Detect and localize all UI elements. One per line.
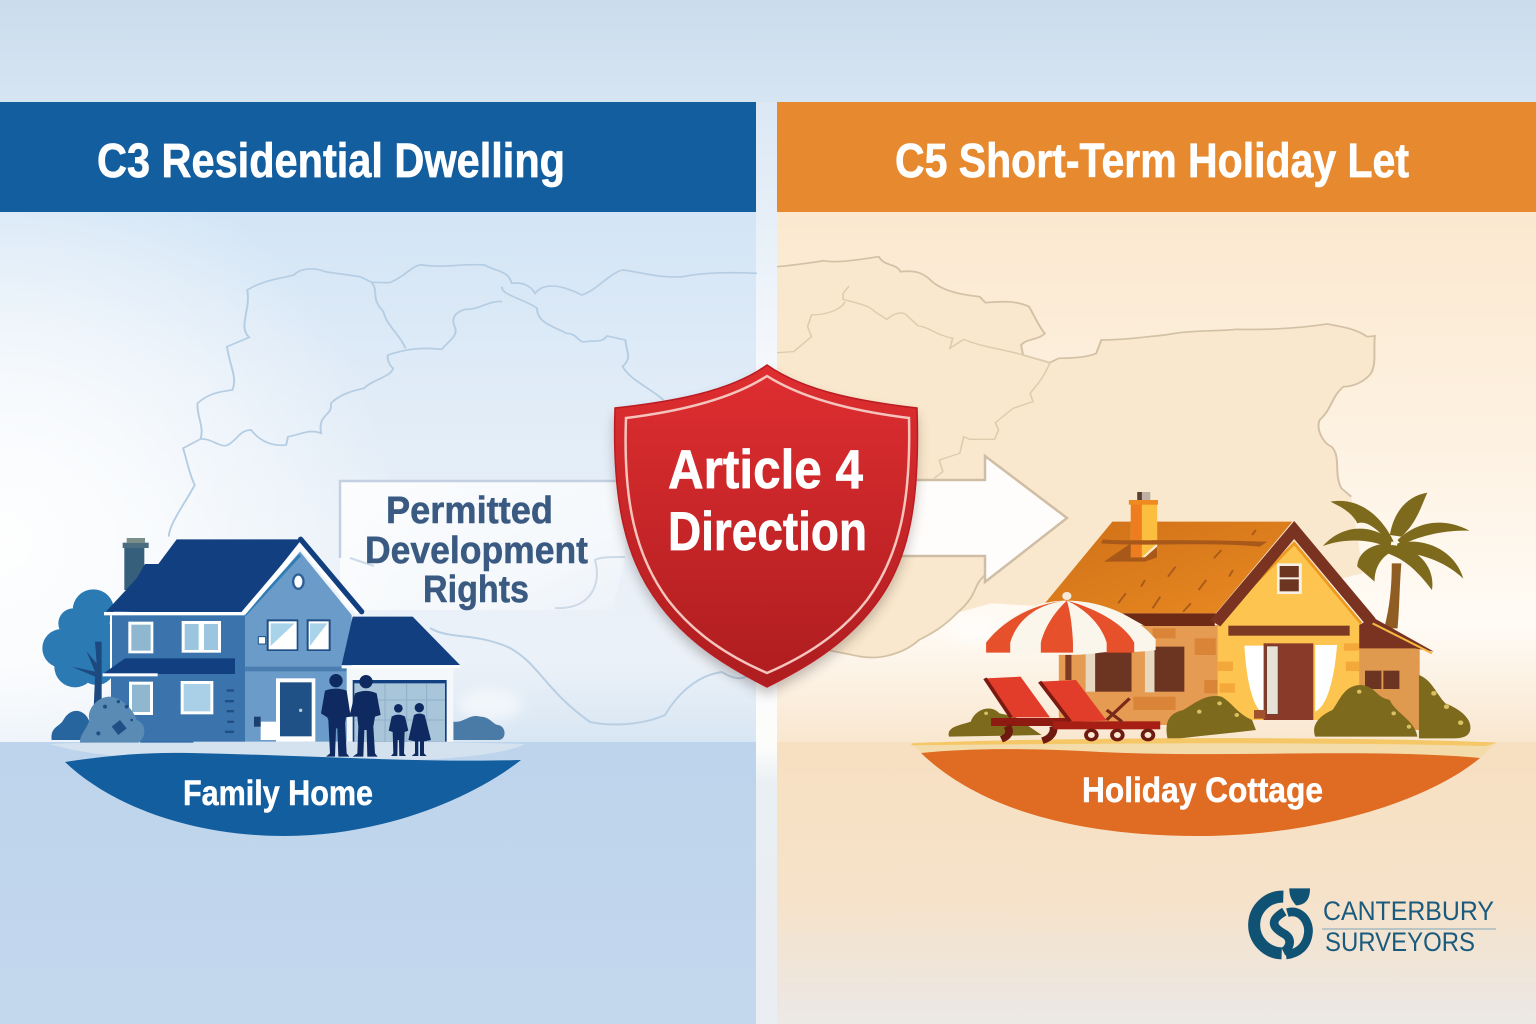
caption base: Family Home: Family Home (183, 774, 373, 813)
caption base: Holiday Cottage (921, 749, 1480, 836)
house body (80, 539, 302, 743)
lounger: right (1040, 680, 1160, 740)
illustration: family home (42, 538, 505, 757)
bush with spots (80, 697, 144, 743)
icon: tree (42, 589, 117, 717)
logo wordmark (1323, 896, 1494, 957)
label: Permitted Development Rights: Permitted (386, 490, 553, 532)
icon: palm tree (1323, 493, 1469, 628)
upper windows (128, 621, 221, 653)
panel: C3 residential (0, 212, 757, 1024)
ground: left island (50, 740, 525, 762)
logo: Canterbury Surveyors (1254, 888, 1496, 957)
haze beside umbrella (953, 620, 997, 644)
logo wordmark: SURVEYORS (1325, 927, 1475, 957)
cottage windows (1086, 647, 1184, 692)
cottage gable (1215, 530, 1371, 720)
door and curtains (1244, 643, 1337, 720)
ground: right island (912, 739, 1496, 760)
arrow: towards C5 (900, 456, 1067, 582)
shrub highlights (984, 690, 1463, 729)
icon: beach umbrella (986, 592, 1156, 680)
header: C5 Short-Term Holiday Let: C5 Short-Term Holiday Let (895, 135, 1409, 188)
door (254, 678, 315, 742)
panel: C5 holiday let (777, 212, 1536, 1024)
icon: chimney (123, 538, 149, 590)
figure: child 1 (389, 704, 408, 756)
logo mark (1254, 888, 1310, 955)
cottage left wall (1059, 613, 1220, 725)
figure: adult 1 (321, 674, 351, 757)
lounger: left (985, 677, 1070, 741)
icon: bushes (51, 711, 505, 743)
map outline: right panel (777, 257, 1375, 657)
cottage annex (1359, 617, 1434, 730)
shield text: Article 4 (668, 438, 863, 500)
garage (342, 617, 460, 742)
header: C5 Short-Term Holiday Let (777, 102, 1536, 212)
label: Permitted Development Rights: Development (365, 530, 588, 572)
logo wordmark: CANTERBURY (1323, 896, 1494, 926)
figure: adult 2 (349, 675, 381, 757)
box: Permitted Development Rights (340, 481, 625, 611)
thatched roof (1044, 522, 1292, 613)
caption base: Family Home (65, 753, 521, 836)
map outline: lower left (430, 628, 756, 724)
shield text: Direction (668, 500, 867, 562)
header: C3 Residential Dwelling: C3 Residential Dwelling (97, 135, 565, 188)
caption base: Holiday Cottage: Holiday Cottage (1082, 771, 1323, 810)
shrubs (949, 675, 1470, 740)
icon: chimney (1129, 492, 1158, 557)
haze behind garage (458, 689, 522, 721)
sand strip (911, 738, 1497, 746)
map outline: left panel (169, 265, 757, 537)
gable windows (258, 619, 331, 651)
gable wing (243, 539, 362, 742)
shield text (668, 438, 867, 562)
family silhouettes (321, 674, 431, 757)
label: Permitted Development Rights: Rights (423, 569, 529, 611)
label: Permitted Development Rights (365, 490, 588, 611)
header: C3 Residential Dwelling (0, 102, 756, 212)
shield: Article 4 Direction (615, 365, 918, 694)
figure: child 2 (408, 703, 431, 756)
lower windows (129, 681, 213, 715)
illustration: holiday cottage (911, 492, 1497, 746)
